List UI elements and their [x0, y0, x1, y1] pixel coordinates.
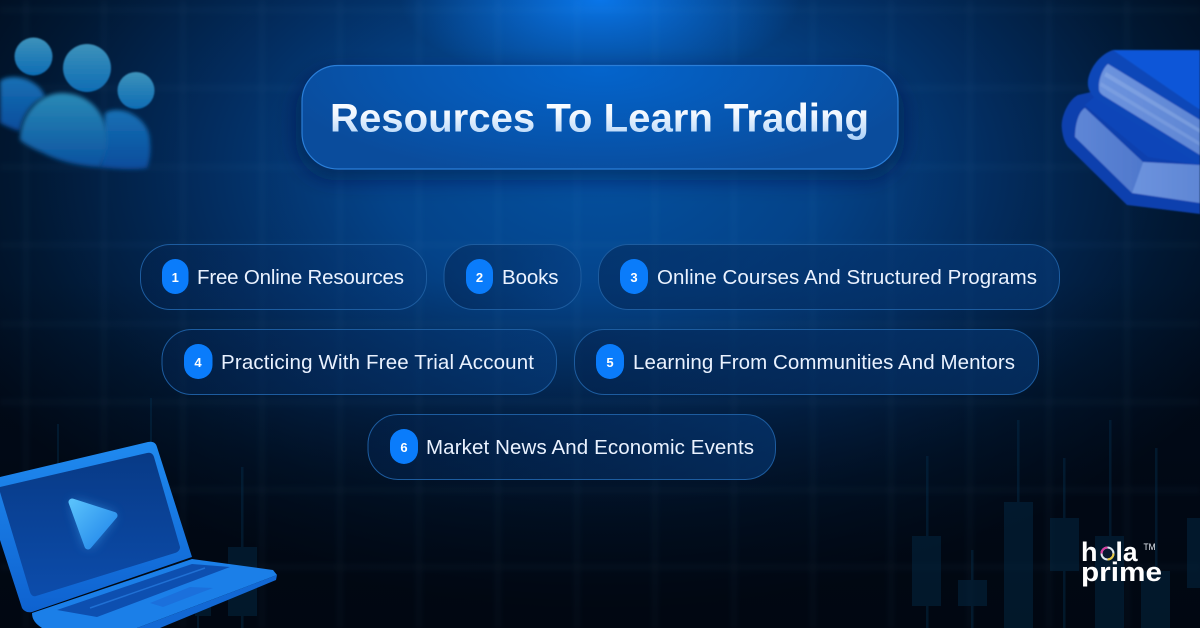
pill 3: Online Courses And Structured Programs: 3 — [630, 270, 638, 285]
pill 3: Online Courses And Structured Programs — [598, 244, 1060, 310]
pill 4: Practicing With Free Trial Account: 4 — [194, 355, 202, 370]
pill 4: Practicing With Free Trial Account: Practicing With Free Trial Account — [221, 351, 534, 374]
logo: hola prime: TM — [1144, 542, 1156, 552]
icon: laptop with play button — [0, 442, 277, 628]
logo: hola prime: la — [1116, 537, 1138, 567]
pill 3: Online Courses And Structured Programs: Online Courses And Structured Programs — [657, 266, 1037, 289]
title: Resources To Learn Trading — [330, 96, 869, 140]
icon: group of people — [0, 38, 154, 169]
pill 5: Learning From Communities And Mentors — [574, 330, 1038, 394]
pill 6: Market News And Economic Events: Market News And Economic Events — [426, 436, 754, 459]
icon: stacked books — [1062, 50, 1200, 214]
logo: hola prime: prime — [1081, 557, 1162, 587]
pill 5: Learning From Communities And Mentors: 5 — [606, 355, 614, 370]
pill 1: Free Online Resources: Free Online Resources — [197, 266, 404, 289]
pill 4: Practicing With Free Trial Account — [162, 330, 556, 394]
pill 2: Books: 2 — [476, 270, 483, 285]
pill 6: Market News And Economic Events — [368, 414, 776, 480]
pill 1: Free Online Resources: 1 — [172, 270, 179, 285]
pill 1: Free Online Resources — [140, 244, 426, 310]
pill 2: Books: Books — [502, 266, 558, 289]
pill 6: Market News And Economic Events: 6 — [400, 440, 408, 455]
candlestick chart backdrop, bottom right — [912, 420, 1200, 628]
pill 5: Learning From Communities And Mentors: Learning From Communities And Mentors — [633, 351, 1015, 374]
title panel — [296, 66, 904, 180]
logo: hola prime: h — [1081, 537, 1098, 567]
pill 2: Books — [444, 244, 581, 310]
candlestick chart backdrop, bottom left — [57, 398, 257, 628]
logo: hola prime — [1081, 537, 1162, 587]
